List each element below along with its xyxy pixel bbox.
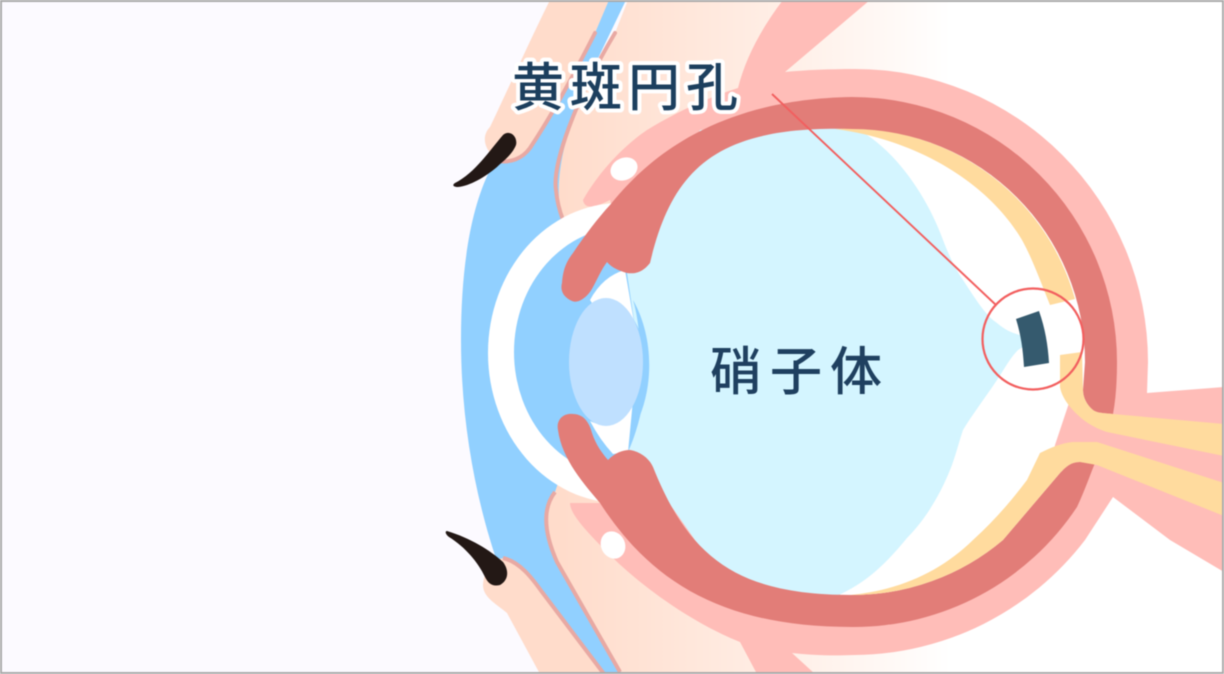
upper eyelid bbox=[485, 0, 609, 161]
white spot lower bbox=[596, 527, 630, 563]
cornea and tear film bbox=[461, 0, 626, 674]
label: vitreous body: 硝子体 bbox=[710, 344, 890, 402]
lens bbox=[569, 298, 643, 426]
anterior chamber white ring bbox=[488, 203, 752, 503]
lower choroid with ciliary body bbox=[558, 414, 1095, 627]
optic nerve sheath inner bbox=[1050, 400, 1120, 470]
anterior chamber bbox=[514, 227, 736, 477]
macular hole marker bbox=[1016, 311, 1049, 367]
lens capsule bottom bbox=[590, 400, 633, 454]
lower eyelid bbox=[483, 558, 604, 674]
upper retina bbox=[835, 128, 1075, 305]
optic nerve upper band bbox=[1060, 352, 1224, 456]
blue sliver behind lens bbox=[631, 300, 649, 434]
orbital tissue bbox=[546, 0, 1000, 674]
lens capsule top bbox=[590, 270, 634, 345]
eyelash upper bbox=[453, 133, 516, 187]
label: macular hole: 黄斑円孔 bbox=[512, 60, 744, 118]
vitreous body bbox=[627, 122, 1026, 602]
eye interior bbox=[840, 115, 1099, 609]
optic nerve lower band and lower retina bbox=[850, 442, 1224, 595]
sclera, extraocular muscles and optic nerve sheath bbox=[570, 0, 1224, 674]
callout line bbox=[772, 94, 996, 305]
white spot upper bbox=[607, 153, 641, 185]
eyelash lower bbox=[446, 531, 507, 586]
callout circle bbox=[982, 288, 1084, 390]
upper choroid with ciliary body bbox=[561, 97, 1117, 414]
